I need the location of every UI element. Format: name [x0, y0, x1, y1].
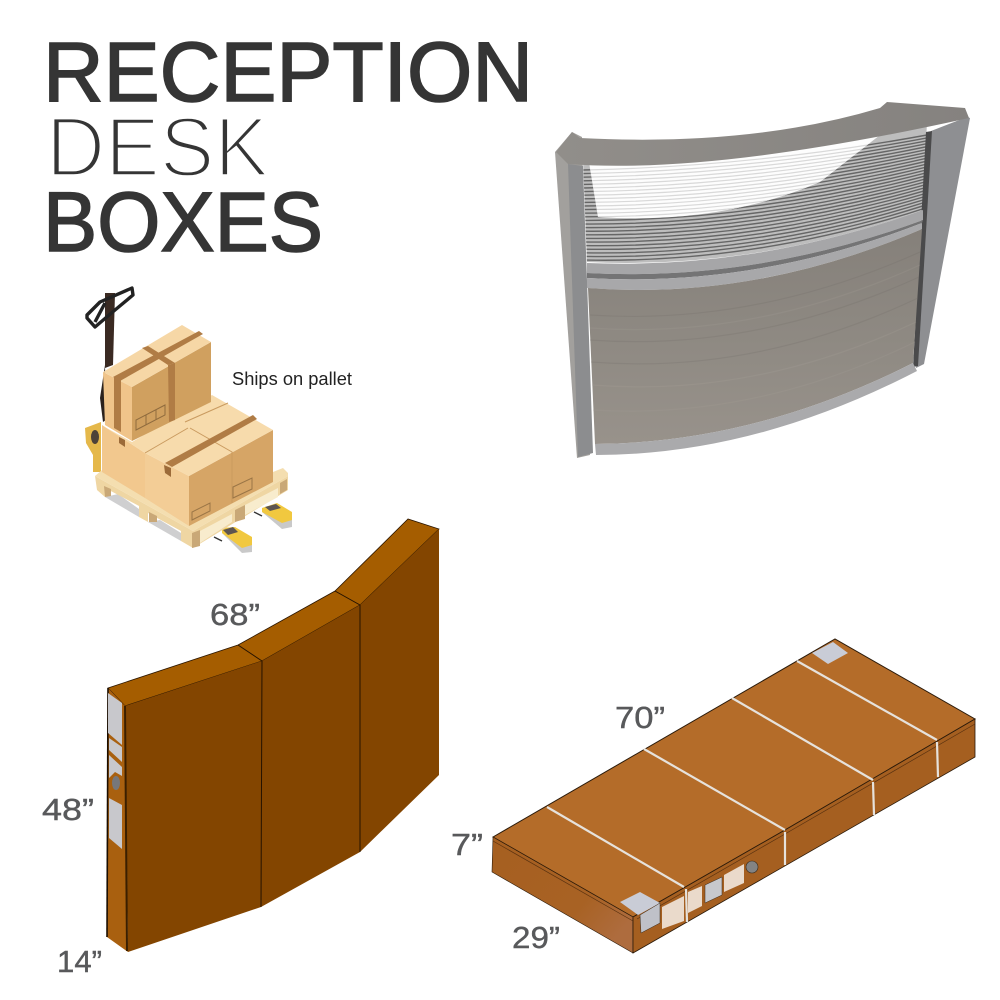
lower boxes top face [103, 395, 273, 476]
dimension: 7: 7” [451, 827, 483, 862]
dimension: 68: 68” [210, 597, 260, 632]
pallet jack with boxes illustration [85, 288, 292, 553]
side circle [746, 861, 758, 873]
flat box right face [633, 719, 975, 953]
fragile icons lower [192, 478, 252, 520]
fork 2 [254, 503, 292, 529]
flat box left face [492, 837, 633, 953]
box top edge faces [108, 519, 439, 706]
desk wood front panel [588, 229, 922, 444]
box front faces [125, 529, 439, 952]
top labels [812, 642, 848, 664]
fragile icons top box [136, 405, 165, 430]
vertical curved box [107, 519, 439, 952]
desk right dark strip [913, 131, 932, 367]
title line: BOXES: BOXES [43, 175, 323, 269]
wheel [91, 430, 99, 444]
desk bottom rail [595, 363, 917, 455]
title line: RECEPTION: RECEPTION [43, 25, 533, 119]
yellow wheel housing [85, 422, 101, 472]
lower left box face [102, 425, 145, 498]
desk upper rail [587, 210, 923, 274]
edge double lines [493, 724, 975, 921]
top box top face [103, 325, 211, 387]
floor shadow [105, 494, 181, 541]
desk lower rail [587, 223, 922, 290]
lower boxes right face [189, 430, 273, 526]
box end face [107, 688, 128, 952]
desk rail gap [587, 220, 923, 279]
desk glass panel [583, 127, 927, 263]
desk right side panel [916, 117, 970, 368]
wood grain [590, 252, 920, 411]
label: ships on pallet: Ships on pallet [232, 369, 352, 389]
flat box [492, 639, 975, 953]
top box tape [113, 331, 203, 432]
top box right face [132, 342, 211, 441]
box edges [238, 591, 360, 907]
reception desk product image [555, 102, 970, 458]
fork 1 [214, 527, 252, 553]
straps [547, 661, 938, 922]
top box left face [103, 372, 132, 441]
end face labels [108, 693, 122, 849]
title [43, 25, 533, 269]
dimension: 14: 14” [57, 944, 102, 979]
box seams and tape [119, 403, 257, 503]
pallet [95, 468, 288, 548]
corner label [620, 892, 660, 915]
desk left outer side panel [555, 132, 590, 458]
desk counter top [556, 102, 969, 166]
dimension: 29: 29” [512, 920, 560, 955]
desk left post [568, 164, 593, 457]
end face circle [112, 776, 120, 790]
lower front box left face [145, 453, 189, 526]
pallet jack handle [87, 288, 133, 422]
dimension: 70: 70” [615, 700, 665, 735]
flat box top face [493, 639, 975, 917]
side labels [640, 864, 744, 933]
title line: DESK: DESK [46, 100, 269, 194]
dimension: 48: 48” [42, 792, 94, 827]
